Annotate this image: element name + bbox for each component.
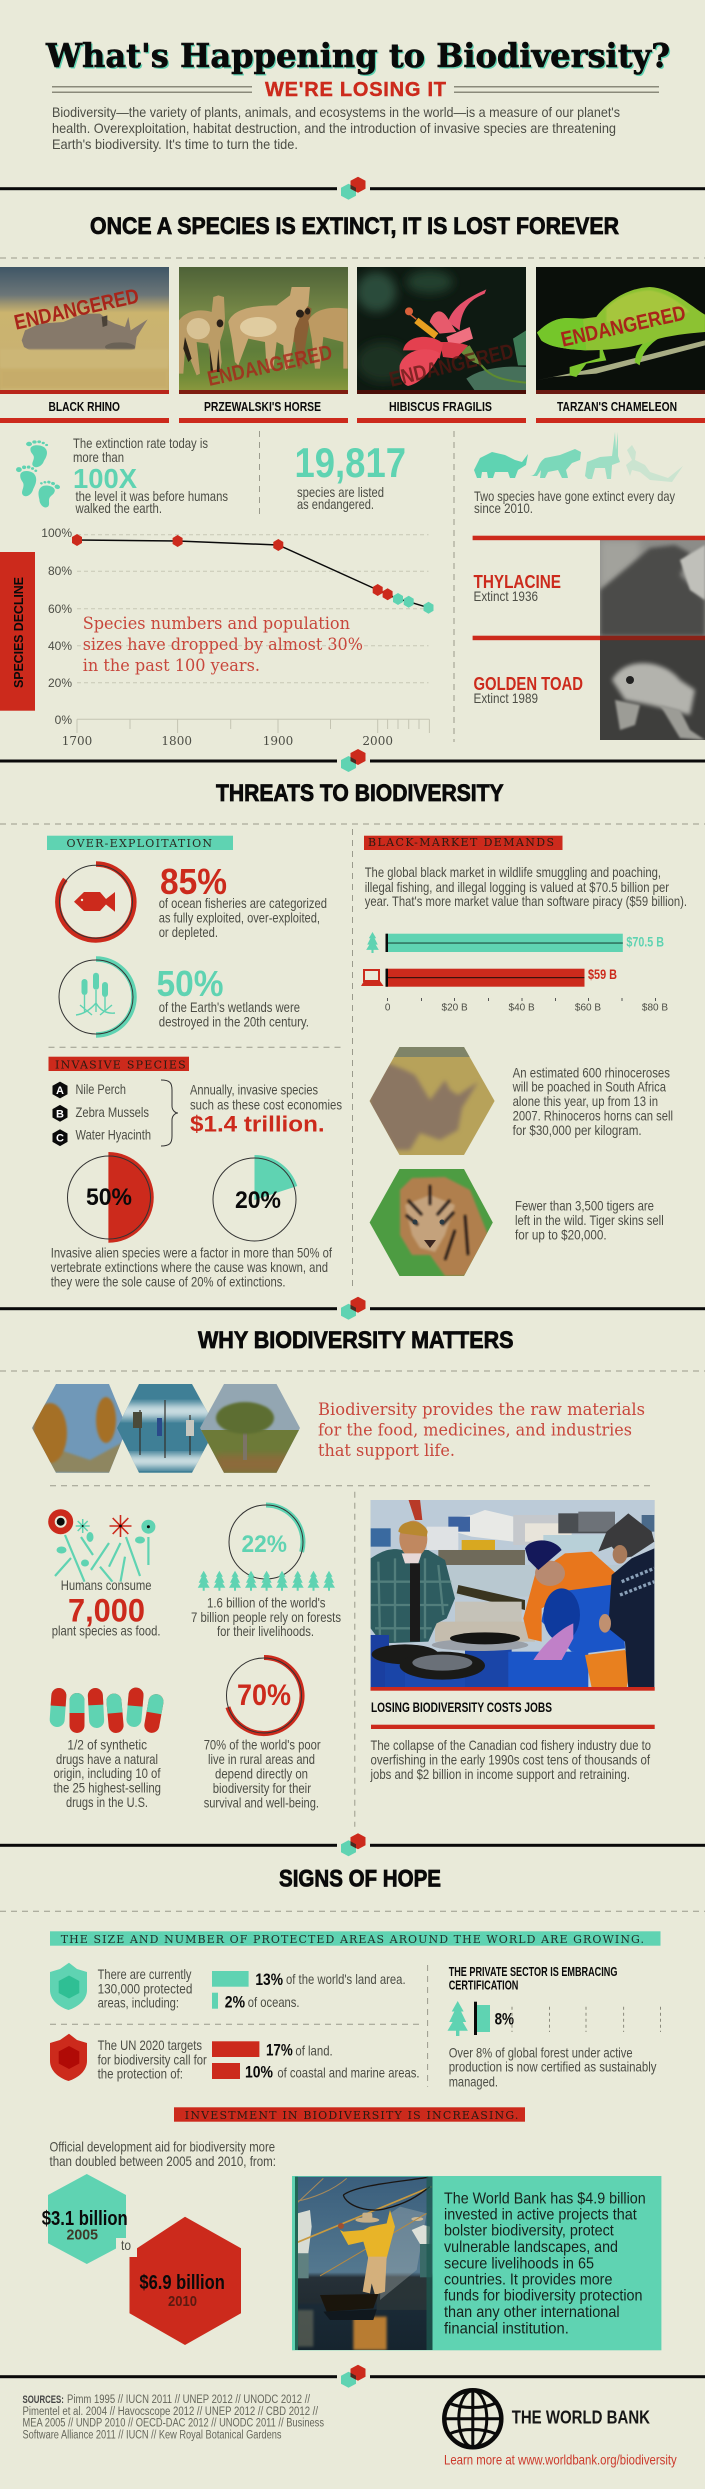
stat: un 2020 targets (98, 2037, 419, 2082)
line chart: species decline: 1800 (161, 734, 192, 748)
text: rhinos: for $30,000 per kilogram. (513, 1122, 642, 1138)
chart callout: sizes have dropped by almost 30% (83, 635, 363, 655)
stat: 100x extinction rate: more than (73, 449, 124, 465)
text: tigers (515, 1198, 664, 1242)
pie: 50%: 50% (86, 1184, 132, 1211)
photo: hibiscus fragilis (356, 267, 526, 394)
stat: 50% wetlands: destroyed in the 20th century. (159, 1014, 309, 1030)
panel: world bank: funds for biodiversity protection (444, 2288, 642, 2305)
bar chart: black market vs software piracy: $59 B (588, 966, 617, 982)
banner: investment: INVESTMENT IN BIODIVERSITY IS INCREASING. (185, 2109, 518, 2122)
line chart: species decline (41, 526, 434, 748)
stat: 7,000 plant species: 7,000 (68, 1593, 145, 1629)
text: rhinos: will be poached in South Africa (512, 1079, 666, 1095)
line chart: species decline: 60% (48, 602, 72, 616)
panel: world bank: bolster biodiversity, protect (444, 2223, 614, 2240)
stat: protected areas (98, 1966, 406, 2011)
red bars under species (0, 418, 705, 423)
stat: 85% fisheries (159, 861, 327, 940)
text: synthetic drugs (54, 1737, 161, 1810)
photo hexagons (30, 1384, 301, 1474)
pie: 20%: 20% (235, 1187, 281, 1214)
stat: 19,817 species: 19,817 (294, 439, 406, 486)
species names: PRZEWALSKI'S HORSE (204, 399, 321, 414)
stat: 19,817 species: as endangered. (297, 496, 374, 512)
icon: wetland ring 50% (59, 959, 134, 1035)
hexagon: 2005 aid: 2005 (66, 2226, 98, 2243)
text: canadian cod collapse (370, 1737, 651, 1782)
text: development aid (50, 2139, 276, 2169)
line chart: species decline: 1700 (62, 734, 92, 748)
label: black-market demands: BLACK-MARKET DEMANDS (368, 836, 554, 849)
endangered stamp: ENDANGERED (387, 340, 516, 392)
pie: 20% (213, 1155, 297, 1241)
hexagon: 2005 aid: $3.1 billion (42, 2208, 128, 2230)
text: golden toad (474, 674, 583, 706)
species names (48, 399, 677, 414)
sources (22, 2394, 324, 2442)
text: black market (365, 864, 687, 909)
icon: footprints (16, 440, 61, 510)
bar chart: black market vs software piracy: 0 (385, 1003, 391, 1014)
text: tigers: for up to $20,000. (515, 1226, 607, 1242)
photo: fishermen with barrels (370, 1499, 655, 1688)
stat: un 2020 targets: 10% (245, 2062, 273, 2081)
stat: protected areas: 2% (225, 1992, 245, 2011)
logo: world bank: THE WORLD BANK (512, 2407, 650, 2427)
section divider (0, 1297, 705, 1320)
intro text (52, 104, 620, 152)
panel: world bank: invested in active projects that (444, 2206, 637, 2223)
chart callout (83, 614, 363, 676)
heading: once a species is extinct: ONCE A SPECIES IS EXTINCT, IT IS LOST FOREVER (90, 213, 619, 240)
bar chart: black market vs software piracy: $70.5 B (626, 934, 664, 950)
stat: 50% wetlands: 50% (156, 963, 224, 1004)
stat: un 2020 targets: 17% (266, 2041, 293, 2060)
text: thylacine (474, 572, 561, 604)
text: two species per day: since 2010. (474, 500, 533, 516)
panel: world bank: than any other international (444, 2304, 620, 2321)
text: thylacine: Extinct 1936 (474, 588, 538, 604)
section divider (0, 2365, 705, 2388)
text: rhinos: alone this year, up from 13 in (513, 1093, 658, 1109)
stat: 50% wetlands (156, 963, 309, 1030)
sources: Pimentel et al. 2004 // Havocscope 2012 // UNEP 2012 // CBD 2012 // (22, 2406, 319, 2418)
line chart: species decline: 80% (48, 564, 72, 578)
text: to: to (121, 2237, 131, 2253)
text: development aid: Official development aid for biodiversity more (50, 2139, 275, 2155)
panel: world bank: The World Bank has $4.9 billion (444, 2190, 646, 2207)
stat: 19,817 species: species are listed (297, 484, 384, 500)
list: invasive species: Water Hyacinth (76, 1127, 151, 1143)
stat: 85% fisheries: or depleted. (159, 924, 218, 940)
panel: world bank: secure livelihoods in 65 (444, 2255, 594, 2272)
list: invasive species (52, 1081, 151, 1146)
intro text: health. Overexploitation, habitat destruction, and the introduction of invasive species are threatening (52, 120, 616, 136)
stat: 100x extinction rate: walked the earth. (75, 500, 162, 516)
bar chart: black market vs software piracy: $60 B (575, 1003, 601, 1014)
text: losing biodiversity costs jobs: LOSING BIODIVERSITY COSTS JOBS (371, 1699, 552, 1715)
species names: TARZAN'S CHAMELEON (557, 399, 677, 414)
section divider (0, 1833, 705, 1856)
title: What's Happening to Biodiversity? (45, 36, 670, 75)
photo: przewalski's horse (179, 267, 348, 394)
list: invasive species: A (56, 1085, 64, 1097)
sources: Pimm 1995 // IUCN 2011 // UNEP 2012 // UNODC 2012 // (67, 2394, 311, 2406)
bar chart: black market vs software piracy: $40 B (509, 1003, 535, 1014)
endangered stamp: ENDANGERED (205, 341, 334, 391)
panel: private sector certification: CERTIFICATION (449, 1977, 518, 1992)
icon: tree (366, 932, 379, 953)
stat: 85% fisheries: of ocean fisheries are categorized (159, 895, 327, 911)
stat: protected areas: 13% (255, 1970, 283, 1989)
stat: $1.4 trillion (190, 1082, 342, 1137)
text: world's poor: survival and well-being. (204, 1795, 319, 1811)
panel: species decline label (0, 552, 35, 711)
panel: private sector certification: managed. (449, 2073, 498, 2089)
chart callout: in the past 100 years. (83, 656, 260, 676)
line chart: species decline: 100% (41, 526, 72, 540)
heading: signs of hope: SIGNS OF HOPE (279, 1866, 441, 1893)
stat: 7,000 plant species (52, 1577, 161, 1639)
stat: un 2020 targets: of land. (295, 2043, 333, 2059)
photo: black rhino (0, 267, 169, 394)
icon: teal shield (50, 1963, 87, 2010)
icon: red shield (50, 2034, 87, 2081)
list: invasive species: B (56, 1108, 64, 1120)
stat: un 2020 targets: for biodiversity call for (98, 2051, 207, 2067)
text: world's poor: live in rural areas and (208, 1751, 315, 1767)
bar chart: black market vs software piracy (361, 932, 668, 1014)
title: What's Happening to Biodiversity? (47, 38, 671, 76)
stat: $1.4 trillion: such as these cost economies (190, 1096, 342, 1112)
sources: SOURCES: (22, 2394, 64, 2406)
text: rhinos (512, 1064, 673, 1138)
icon: flowers (48, 1509, 155, 1582)
chart callout: Species numbers and population (83, 614, 350, 634)
callout: raw materials: that support life. (318, 1441, 455, 1461)
extinct species bars (473, 536, 705, 640)
stat: 100x extinction rate (73, 435, 228, 516)
hexagon: 2010 aid: $6.9 billion (139, 2272, 225, 2294)
icon: laptop (361, 970, 384, 986)
ring: 22% forests: 22% (242, 1531, 287, 1558)
icon: fading animals (474, 432, 683, 482)
photo: tarzan's chameleon (536, 267, 705, 394)
label: invasive species: INVASIVE SPECIES (55, 1058, 186, 1071)
ring: 22% forests (229, 1505, 303, 1579)
icon: pills (49, 1687, 165, 1734)
line chart: species decline: 0% (55, 713, 72, 727)
icon: fish ring 85% (58, 864, 134, 940)
pie: 50% (68, 1152, 154, 1243)
text: forests: 7 billion people rely on forests (191, 1609, 341, 1625)
text: world's poor: 70% of the world's poor (204, 1737, 321, 1753)
photo: fisherman (295, 2176, 433, 2351)
list: invasive species: C (56, 1133, 64, 1145)
intro text: Biodiversity—the variety of plants, animals, and ecosystems in the world—is a measure of our planet's (52, 104, 620, 120)
stat: 100x extinction rate: 100X (73, 463, 137, 494)
text: synthetic drugs: drugs in the U.S. (66, 1794, 148, 1810)
text: synthetic drugs: 1/2 of synthetic (67, 1737, 147, 1753)
heading: why biodiversity matters: WHY BIODIVERSITY MATTERS (198, 1327, 514, 1354)
icon row: trees (198, 1571, 335, 1591)
panel: private sector certification: Over 8% of global forest under active (449, 2044, 633, 2060)
text: forests: 1.6 billion of the world's (207, 1594, 326, 1610)
stat: 100x extinction rate: The extinction rate today is (73, 435, 208, 451)
text: forests: for their livelihoods. (217, 1623, 314, 1639)
list: invasive species: Nile Perch (76, 1081, 126, 1097)
panel: world bank: financial institution. (444, 2320, 569, 2337)
banner: protected areas: THE SIZE AND NUMBER OF PROTECTED AREAS AROUND THE WORLD ARE GROWING. (61, 1933, 644, 1946)
species names: BLACK RHINO (48, 399, 120, 414)
text: golden toad: Extinct 1989 (474, 690, 538, 706)
panel: private sector certification: THE PRIVATE SECTOR IS EMBRACING (449, 1964, 617, 1979)
line chart: species decline: 40% (48, 639, 72, 653)
species names: HIBISCUS FRAGILIS (389, 399, 492, 414)
text: synthetic drugs: drugs have a natural (56, 1751, 158, 1767)
panel: private sector certification: 8% (495, 2009, 514, 2028)
text: invasive alien species: they were the sole cause of 20% of extinctions. (51, 1274, 285, 1290)
panel: private sector certification (448, 1964, 660, 2089)
sources: MEA 2005 // UNDP 2010 // OECD-DAC 2012 // UNODC 2011 // Business (22, 2418, 324, 2430)
photo: tiger hexagon (369, 1169, 494, 1277)
stat: un 2020 targets: the protection of: (98, 2066, 183, 2082)
list: invasive species: Zebra Mussels (76, 1104, 149, 1120)
intro text: Earth's biodiversity. It's time to turn the tide. (52, 136, 298, 152)
text: tigers: left in the wild. Tiger skins sell (515, 1212, 664, 1228)
stat: 7,000 plant species: plant species as food. (52, 1623, 161, 1639)
line chart: species decline: 2000 (362, 734, 393, 748)
stat: un 2020 targets: of coastal and marine areas. (277, 2064, 420, 2080)
callout: raw materials (318, 1400, 645, 1461)
panel: private sector certification: production is now certified as sustainably (449, 2059, 656, 2075)
text: two species per day (474, 488, 675, 516)
text: world's poor (204, 1737, 321, 1811)
text: canadian cod collapse: overfishing in the early 1990s cost tens of thousands of (370, 1751, 650, 1767)
stat: 19,817 species (294, 439, 406, 512)
line chart: species decline: 1900 (263, 734, 293, 748)
stat: 100x extinction rate: the level it was before humans (76, 488, 228, 504)
text: rhinos: An estimated 600 rhinoceroses (513, 1064, 670, 1080)
stat: 7,000 plant species: Humans consume (61, 1577, 152, 1593)
subtitle: WE'RE LOSING IT (265, 79, 446, 101)
stat: $1.4 trillion: Annually, invasive species (190, 1082, 318, 1098)
stat: protected areas: 130,000 protected (98, 1980, 192, 1996)
callout: raw materials: for the food, medicines, and industries (318, 1421, 632, 1441)
stat: protected areas: of oceans. (248, 1994, 300, 2010)
hexagon: 2005 aid (42, 2174, 137, 2264)
panel: world bank: vulnerable landscapes, and (444, 2239, 618, 2256)
panel: world bank: countries. It provides more (444, 2271, 612, 2288)
text: thylacine: THYLACINE (474, 572, 561, 592)
endangered stamp: ENDANGERED (12, 285, 141, 335)
text: synthetic drugs: the 25 highest-selling (54, 1780, 161, 1796)
brace (161, 1080, 178, 1146)
section divider (0, 749, 705, 772)
stat: 85% fisheries: as fully exploited, over-exploited, (159, 910, 320, 926)
panel: world bank (292, 2176, 661, 2351)
section divider (0, 177, 705, 200)
text: world's poor: depend directly on (215, 1766, 308, 1782)
text: synthetic drugs: origin, including 10 of (54, 1765, 161, 1781)
text: tigers: Fewer than 3,500 tigers are (515, 1198, 654, 1214)
bar chart: black market vs software piracy: $80 B (642, 1003, 668, 1014)
ring: 70% rural poor: 70% (237, 1679, 291, 1712)
text: world's poor: biodiversity for their (213, 1780, 311, 1796)
panel: species decline label: SPECIES DECLINE (12, 577, 26, 688)
stat: protected areas: of the world's land area. (286, 1971, 406, 1987)
text: invasive alien species (51, 1245, 332, 1290)
stat: protected areas: There are currently (98, 1966, 192, 1982)
stat: 85% fisheries: 85% (160, 861, 227, 902)
text: invasive alien species: Invasive alien species were a factor in more than 50% of (51, 1245, 332, 1261)
sources: Software Alliance 2011 // IUCN // Kew Royal Botanical Gardens (22, 2430, 282, 2442)
text: forests (191, 1594, 341, 1639)
ring: 70% rural poor (226, 1657, 302, 1734)
photo: rhino hexagon (369, 1047, 495, 1155)
stat: protected areas: areas, including: (98, 1995, 179, 2011)
callout: raw materials: Biodiversity provides the raw materials (318, 1400, 645, 1420)
text: development aid: than doubled between 2005 and 2010, from: (50, 2153, 276, 2169)
line chart: species decline: 20% (48, 676, 72, 690)
icon: tree (448, 2001, 468, 2036)
hexagon: 2010 aid: 2010 (168, 2293, 197, 2310)
label: over-exploitation: OVER-EXPLOITATION (66, 837, 212, 850)
text: golden toad: GOLDEN TOAD (474, 674, 583, 694)
hexagon: 2010 aid (130, 2217, 241, 2345)
stat: un 2020 targets: The UN 2020 targets (98, 2037, 202, 2053)
stat: $1.4 trillion: $1.4 trillion. (190, 1112, 325, 1137)
photo: golden toad (600, 640, 705, 740)
logo: world bank (444, 2390, 650, 2448)
stat: 50% wetlands: of the Earth's wetlands were (159, 999, 300, 1015)
bar chart: black market vs software piracy: $20 B (442, 1003, 468, 1014)
photo: thylacine (600, 540, 705, 636)
text: canadian cod collapse: jobs and $2 billion in income support and retraining. (370, 1766, 630, 1782)
text: invasive alien species: vertebrate extinctions where the cause was known, and (51, 1259, 328, 1275)
heading: threats: THREATS TO BIODIVERSITY (216, 780, 504, 807)
